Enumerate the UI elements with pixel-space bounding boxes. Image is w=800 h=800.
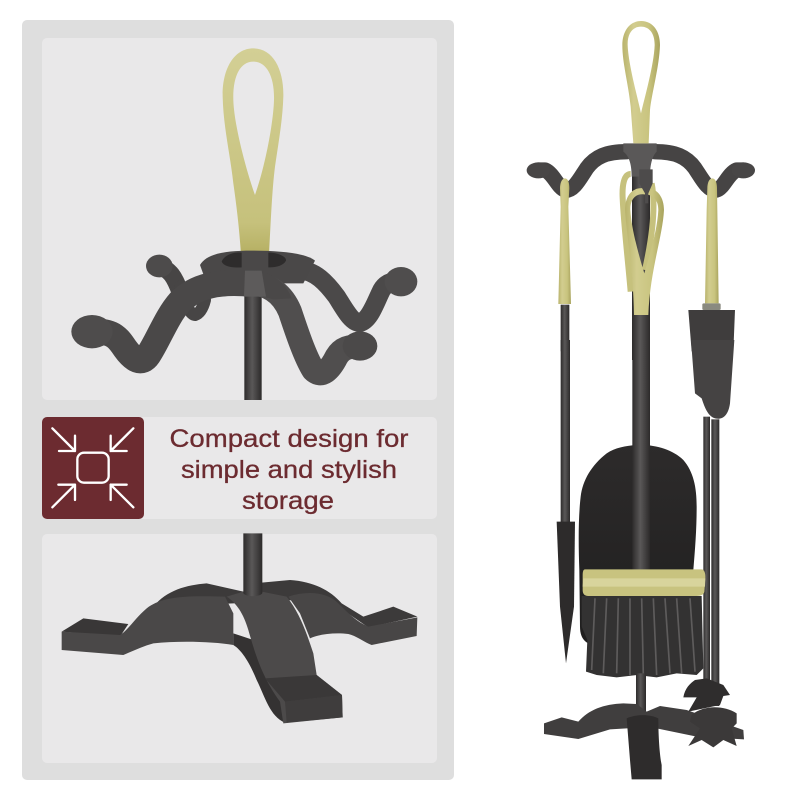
dustpan — [579, 445, 697, 643]
brass loop handle — [223, 48, 283, 266]
hub socket — [222, 253, 286, 268]
rack blob ends — [527, 162, 755, 178]
image backdrop: base — [42, 534, 437, 763]
hub top with cavity — [200, 251, 315, 283]
icon: compact arrows — [42, 417, 144, 519]
hanging clip — [639, 169, 653, 203]
shovel blade front leaf — [688, 707, 737, 747]
icon: cast iron base — [62, 533, 417, 723]
shovel rods — [703, 417, 710, 688]
shovel head lower — [691, 340, 734, 419]
hub body — [187, 269, 292, 308]
back right arm — [298, 267, 417, 323]
left leg face — [62, 596, 233, 655]
poker handle — [558, 178, 571, 304]
upper tool set — [527, 21, 755, 360]
centre rods — [632, 340, 650, 573]
caption backdrop — [42, 417, 437, 519]
icon: rack top with brass loop handle — [71, 48, 417, 400]
icon tile — [42, 417, 144, 519]
left foot top — [62, 618, 128, 637]
right leg face — [288, 593, 417, 645]
back top surface — [153, 580, 417, 627]
brush bristles — [582, 596, 703, 677]
shovel handle — [705, 178, 719, 303]
front brass loop — [625, 188, 664, 315]
lower tool set — [544, 340, 744, 779]
hub centre face — [244, 271, 266, 297]
panel backdrop — [22, 20, 454, 780]
shovel blade rear leaf — [683, 678, 730, 712]
rear rods — [632, 160, 650, 360]
brass brush band — [583, 569, 705, 596]
panel: feature card — [22, 20, 454, 780]
panel: base close-up — [42, 533, 437, 763]
back left arm — [146, 255, 205, 315]
front foot end — [285, 695, 343, 723]
front left arm — [71, 283, 243, 360]
bristle strands — [592, 598, 695, 675]
panel: caption strip — [42, 417, 437, 519]
poker rod — [561, 340, 570, 523]
caption text: storage — [242, 487, 334, 515]
rack hub — [623, 143, 657, 177]
base front leg — [627, 715, 662, 779]
base side legs — [544, 703, 744, 739]
centre pole — [244, 293, 262, 400]
shovel head upper — [688, 310, 735, 351]
compress glyph — [52, 428, 133, 507]
poker spike — [557, 522, 575, 663]
front leg shadow side — [233, 633, 285, 723]
front leg — [227, 592, 343, 723]
image backdrop: top — [42, 38, 437, 400]
caption text: Compact design for — [170, 425, 408, 453]
shovel collar — [702, 303, 721, 310]
front right arm — [247, 283, 377, 373]
panel: top hook close-up — [42, 38, 437, 400]
caption text — [170, 425, 408, 515]
foot top — [265, 675, 342, 702]
pole — [243, 533, 262, 596]
caption text: simple and stylish — [181, 456, 397, 484]
panel: full tool set — [527, 21, 755, 779]
rack arms — [538, 152, 743, 190]
base pole — [636, 673, 646, 713]
band top highlight — [583, 578, 705, 587]
poker rod upper — [561, 305, 569, 351]
top brass loop — [622, 21, 660, 143]
shovel rod front — [711, 419, 719, 706]
rear brass loop — [623, 174, 653, 292]
